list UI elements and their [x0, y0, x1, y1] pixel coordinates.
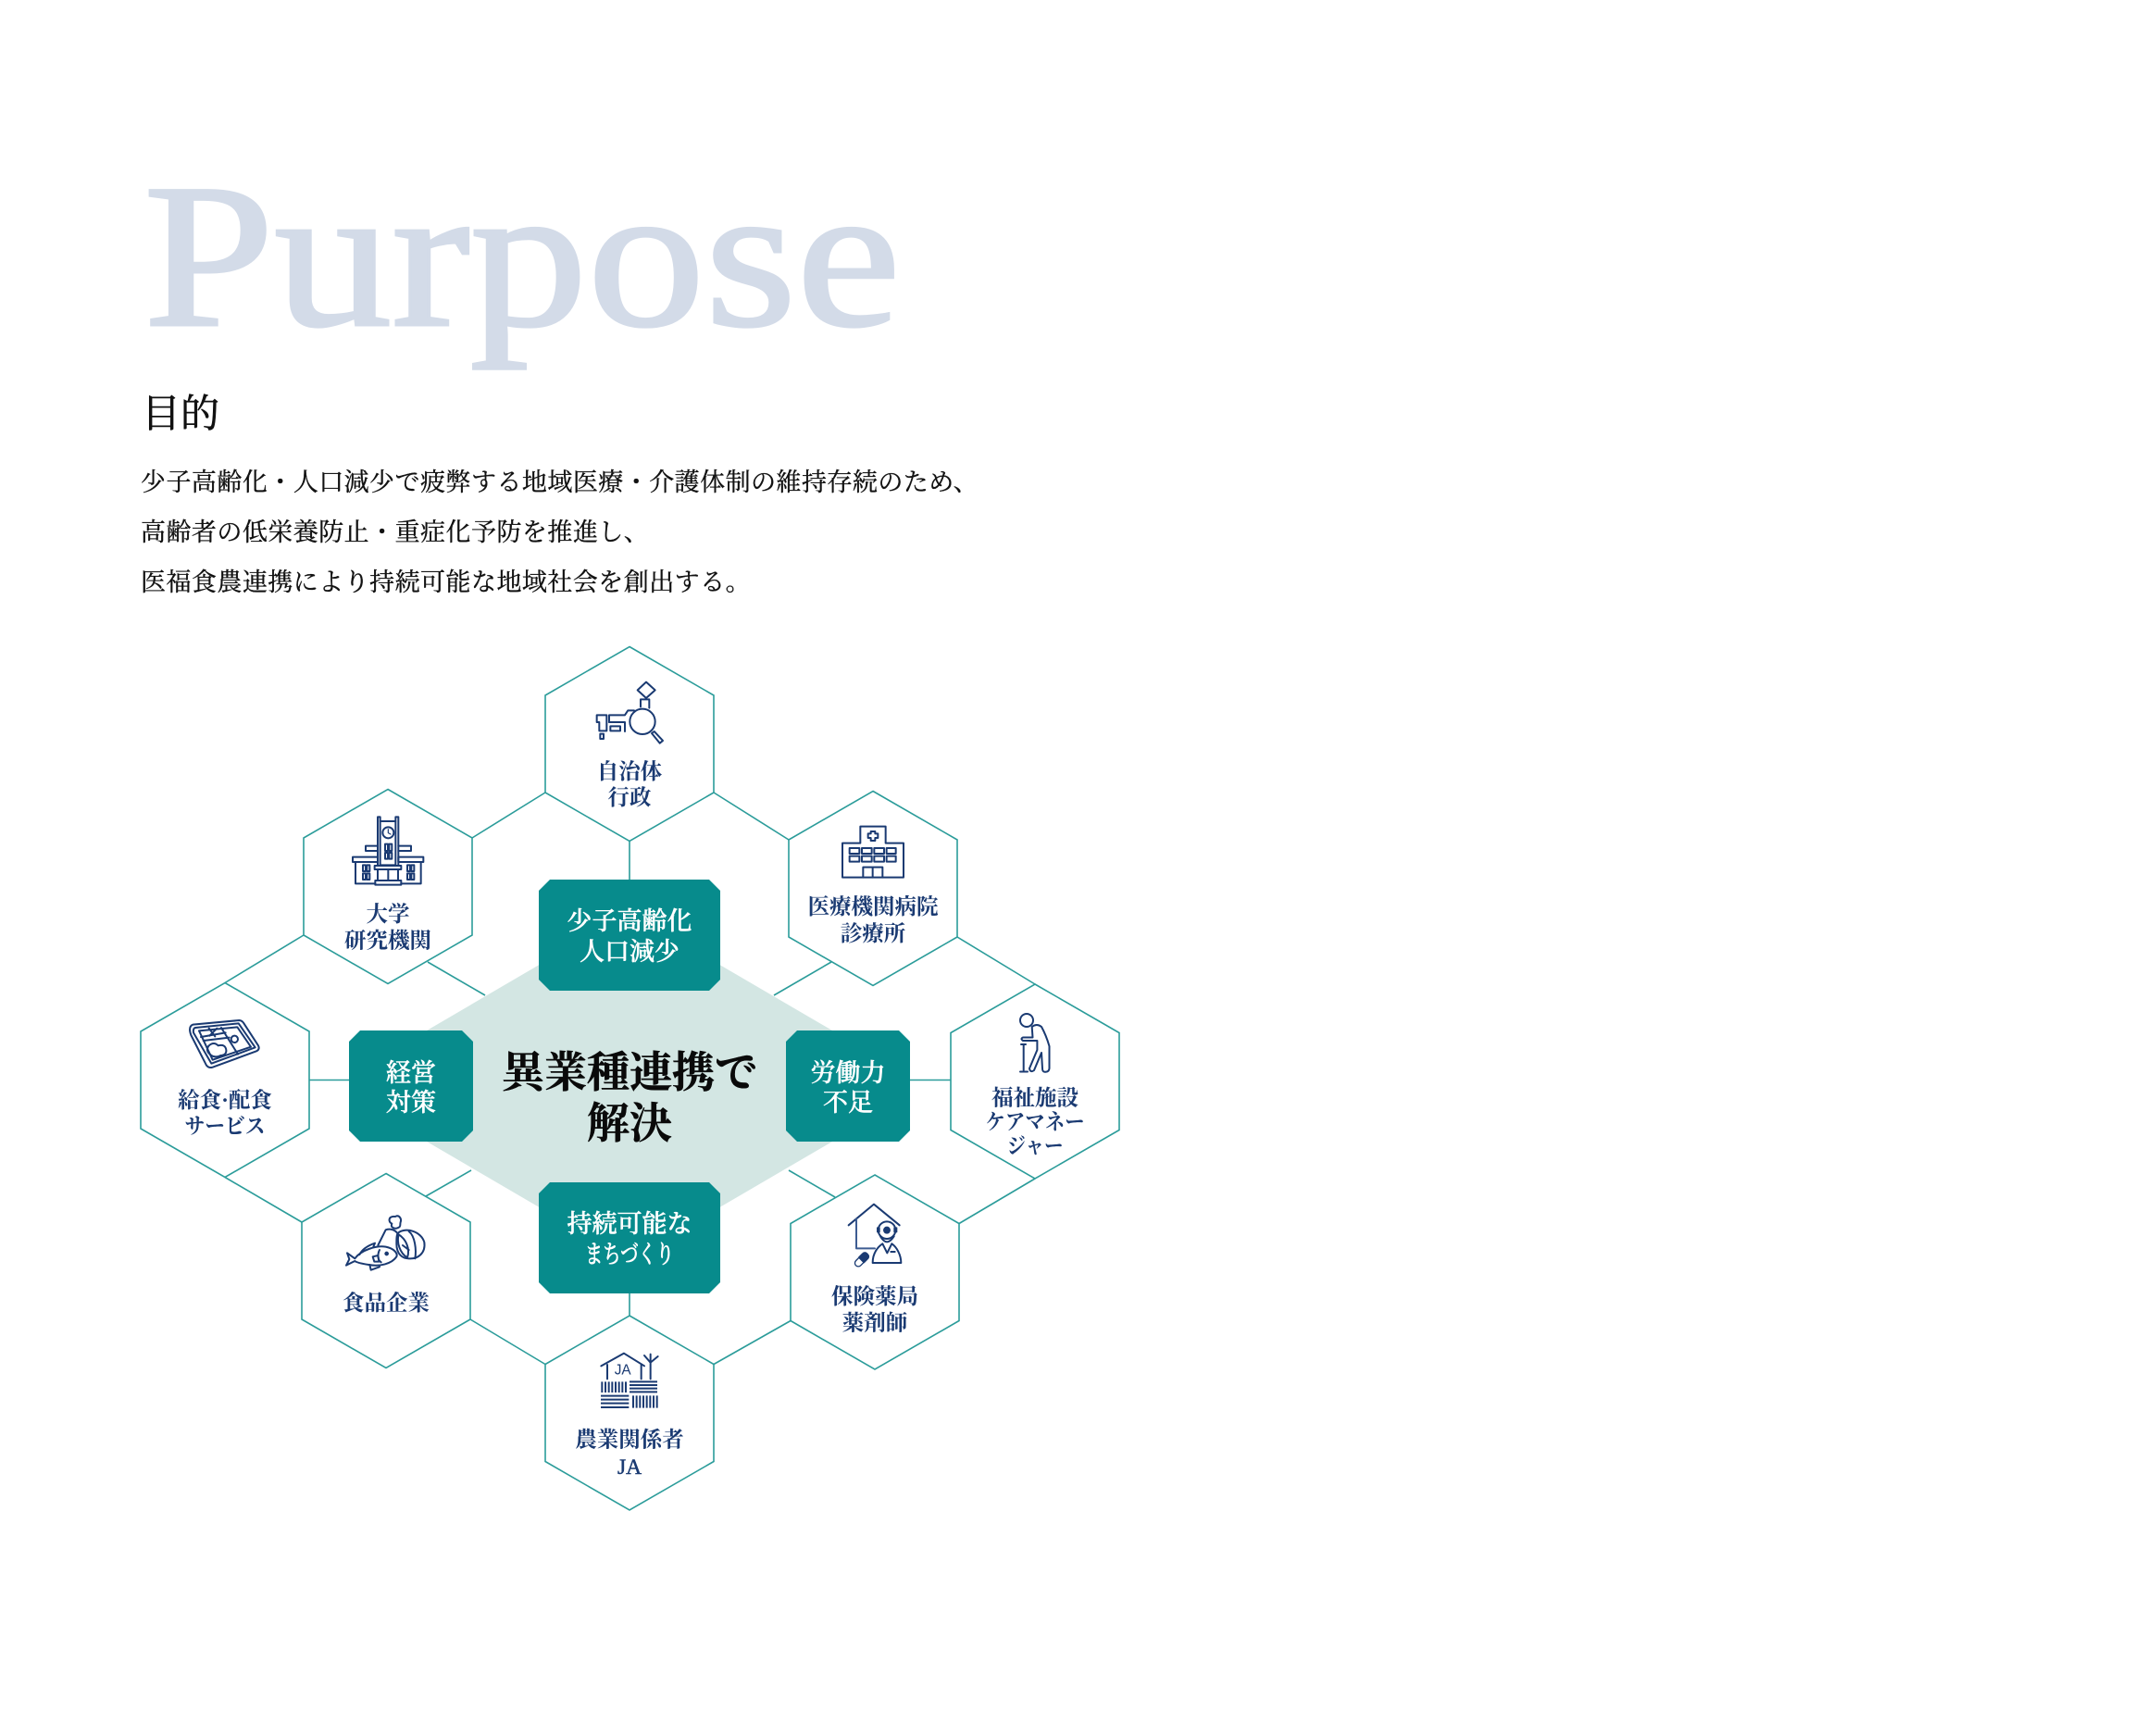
- hexagon: 農業関係者 JA: [545, 1316, 714, 1510]
- hexagon: 食品企業: 食品企業: [343, 1291, 430, 1316]
- issue box: 経営対策: 経営: [386, 1059, 436, 1087]
- center text: 解決: [587, 1100, 672, 1147]
- issue box: 少子高齢化 人口減少: [539, 880, 720, 991]
- issue box: 持続可能なまちづくり: 持続可能な: [567, 1210, 692, 1238]
- hexagon: 大学 研究機関: 研究機関: [344, 928, 431, 954]
- hexagon: 給食・配食 サービス: [141, 983, 309, 1178]
- icon: map and magnifier: [597, 682, 663, 743]
- center light hexagon: [389, 912, 870, 1260]
- hexagon: 医療機関病院 診療所: 診療所: [841, 921, 905, 946]
- hexagon: 福祉施設 ケアマネージャー: ジャー: [1007, 1135, 1063, 1159]
- hexagon: 農業関係者 JA: 農業関係者: [575, 1428, 684, 1452]
- hexagon: 農業関係者 JA: JA: [617, 1455, 642, 1480]
- hexagon: 自治体 行政: 自治体: [597, 758, 663, 784]
- issue box: 労働力不足: 労働力: [811, 1059, 885, 1087]
- hexagon: 福祉施設 ケアマネージャー: [951, 984, 1119, 1179]
- title: Purpose: Purpose: [143, 143, 901, 370]
- hexagon: 医療機関病院 診療所: [789, 791, 957, 985]
- text block: purpose description: [141, 468, 979, 596]
- center text: [502, 1049, 757, 1147]
- issue box: 労働力不足: [786, 1030, 910, 1142]
- icon: hospital: [842, 827, 904, 878]
- icon: JA house and fields: JA: [615, 1362, 631, 1378]
- hexagon: 保険薬局 薬剤師: 薬剤師: [842, 1311, 907, 1335]
- issue box: 少子高齢化 人口減少: 人口減少: [580, 938, 680, 966]
- center text: 異業種連携で: [502, 1049, 757, 1096]
- icon: elderly person with cane: [1020, 1014, 1050, 1072]
- hexagon: 大学 研究機関: [304, 789, 472, 983]
- heading: 目的: 目的: [142, 393, 219, 436]
- hexagon: 食品企業: [302, 1174, 470, 1368]
- hexagon: 給食・配食 サービス: サービス: [185, 1115, 265, 1139]
- hexagon: 自治体 行政: [545, 646, 714, 841]
- icon: JA house and fields: [601, 1354, 658, 1408]
- hexagon: 給食・配食 サービス: 給食·配食: [178, 1088, 272, 1113]
- hexagon: 保険薬局 薬剤師: [791, 1175, 959, 1369]
- issue box: 持続可能なまちづくり: [539, 1182, 720, 1293]
- icon: bento box: [190, 1020, 259, 1068]
- icon: fish and vegetables: [346, 1216, 425, 1270]
- hexagon: 医療機関病院 診療所: 医療機関病院: [807, 894, 939, 919]
- hexagon: 自治体 行政: 行政: [607, 785, 652, 810]
- issue box: 少子高齢化 人口減少: 少子高齢化: [567, 907, 692, 935]
- issue box: 労働力不足: 不足: [823, 1089, 873, 1117]
- text block: purpose description: 少子高齢化・人口減少で疲弊する地域医療・介護体制の維持存続のため、: [141, 468, 979, 496]
- diagram: hexagon network: [141, 646, 1119, 1510]
- connector lines: [225, 793, 1035, 1365]
- issue box: 持続可能なまちづくり: まちづくり: [585, 1241, 674, 1268]
- hexagon: 保険薬局 薬剤師: 保険薬局: [831, 1284, 918, 1309]
- hexagon: 大学 研究機関: 大学: [367, 902, 409, 927]
- text block: purpose description: 高齢者の低栄養防止・重症化予防を推進し、: [141, 518, 649, 546]
- hexagon: 福祉施設 ケアマネージャー: 福祉施設: [991, 1085, 1078, 1111]
- text block: purpose description: 医福食農連携により持続可能な地域社会を創出する。: [141, 568, 751, 596]
- icon: university building: [353, 817, 423, 885]
- issue box: 経営対策: [349, 1030, 473, 1142]
- icon: pharmacist and house: [849, 1205, 901, 1268]
- hexagon: 福祉施設 ケアマネージャー: ケアマネー: [985, 1111, 1085, 1135]
- issue box: 経営対策: 対策: [386, 1089, 436, 1117]
